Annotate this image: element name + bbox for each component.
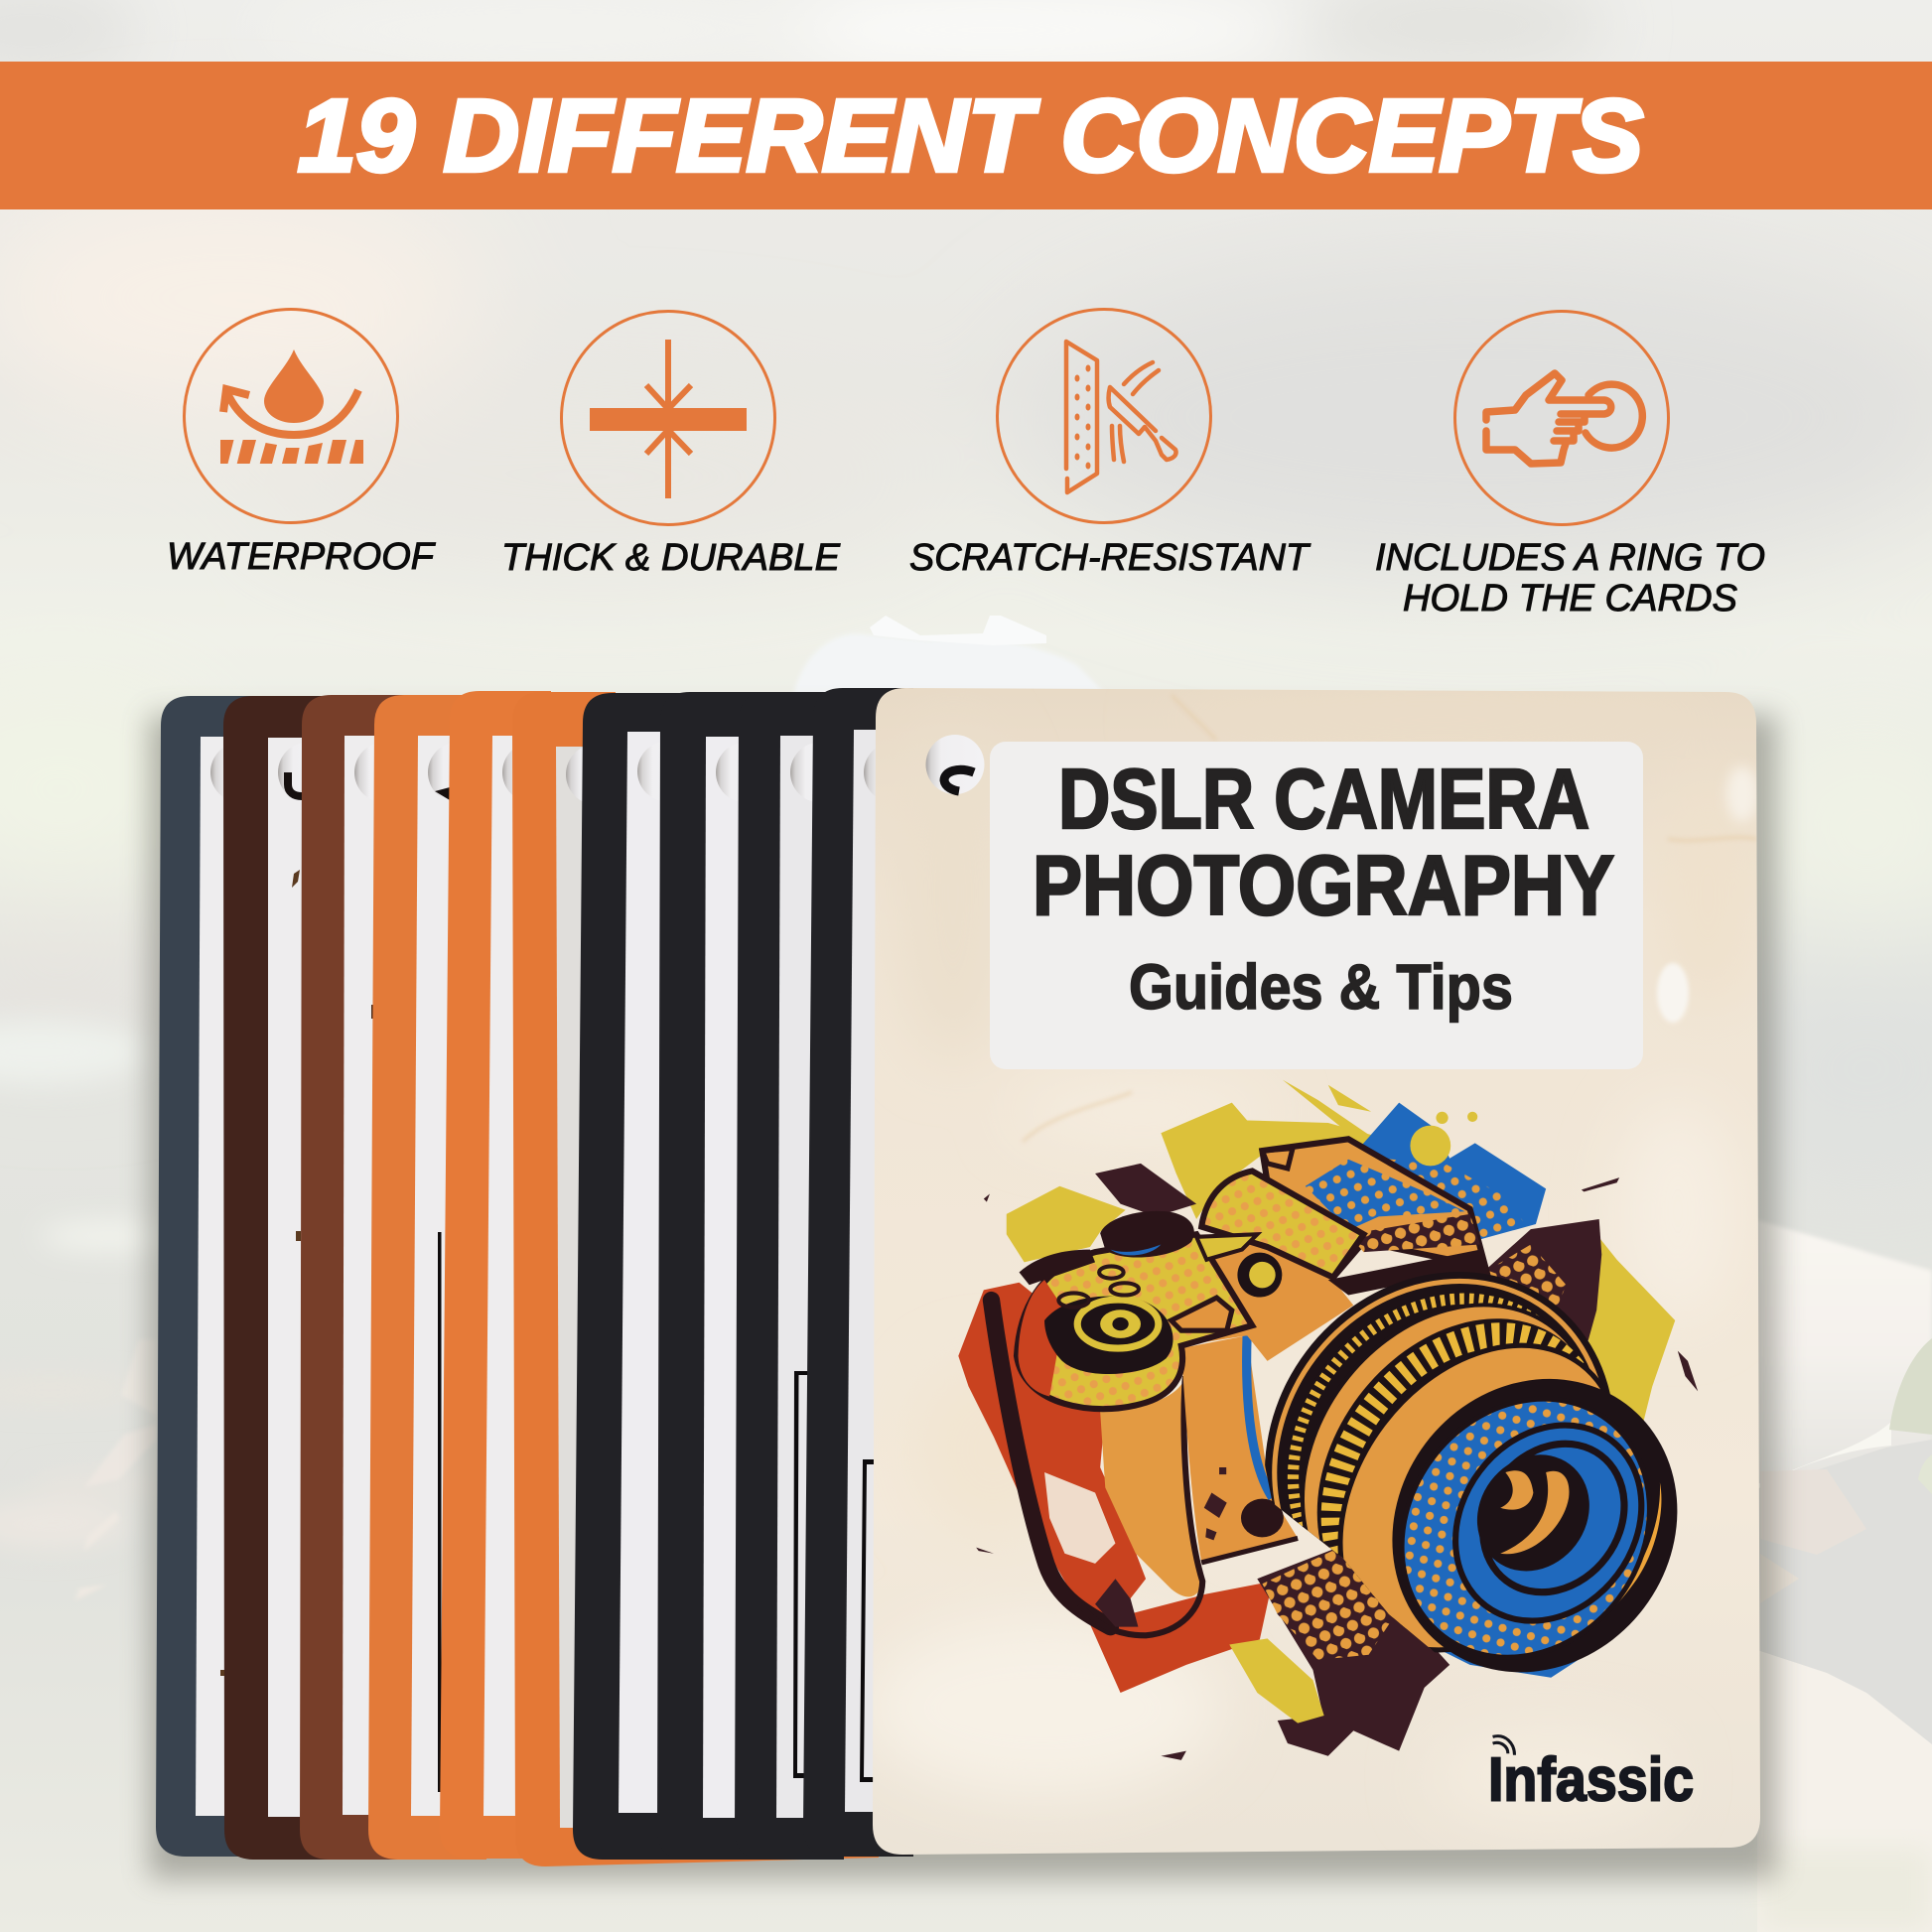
card: brown (300, 695, 412, 1860)
card: slate (156, 696, 268, 1857)
label: SCRATCH-RESISTANT (909, 537, 1311, 579)
camera lens barrel (1265, 1272, 1610, 1652)
card: black 3 (735, 692, 848, 1860)
feature: includes a ring (1375, 312, 1765, 620)
title panel (990, 742, 1643, 1069)
icon: knife against panel (997, 310, 1211, 522)
camera lens front (1334, 1321, 1735, 1729)
card: front cover (864, 688, 1760, 1855)
feature: thick and durable (501, 312, 841, 579)
card: black 1 (573, 693, 695, 1860)
card: black 4 (803, 688, 921, 1857)
paint splashes (958, 1080, 1698, 1760)
camera illustration (958, 1080, 1735, 1815)
feature: scratch resistant (909, 310, 1311, 579)
card: orange 3 (512, 692, 879, 1866)
label: WATERPROOF (167, 536, 436, 578)
cream slope on the right (1757, 1220, 1932, 1932)
title: 19 DIFFERENT CONCEPTS (298, 78, 1643, 193)
infassic logo: Infassic (1488, 1746, 1694, 1815)
title panel: PHOTOGRAPHY (1033, 839, 1614, 933)
card deck (156, 688, 1760, 1866)
label (1375, 537, 1765, 620)
card: orange 1 (368, 695, 486, 1860)
orange title banner (0, 62, 1932, 209)
camera prism and roof (1196, 1139, 1496, 1308)
punched hole (925, 735, 985, 794)
feature: waterproof (167, 310, 436, 578)
card: black 2 (657, 692, 774, 1860)
card: orange 2 (440, 691, 560, 1859)
card: dark brown (220, 696, 338, 1860)
camera grip and body (991, 1211, 1353, 1635)
icon: finger through ring (1455, 312, 1668, 524)
white binder ring (793, 616, 1107, 695)
soil texture on the left (75, 1339, 156, 1600)
card deck shadow (149, 715, 1777, 1878)
icon: compression arrows on slab (562, 312, 774, 524)
label: INCLUDES A RING TO (1375, 537, 1765, 579)
label: THICK & DURABLE (501, 537, 841, 579)
title panel: DSLR CAMERA (1058, 753, 1589, 847)
label: HOLD THE CARDS (1403, 578, 1737, 620)
marble texture (864, 694, 1758, 1827)
icon: water drop over fabric (185, 310, 397, 522)
title panel: Guides & Tips (1129, 951, 1513, 1023)
